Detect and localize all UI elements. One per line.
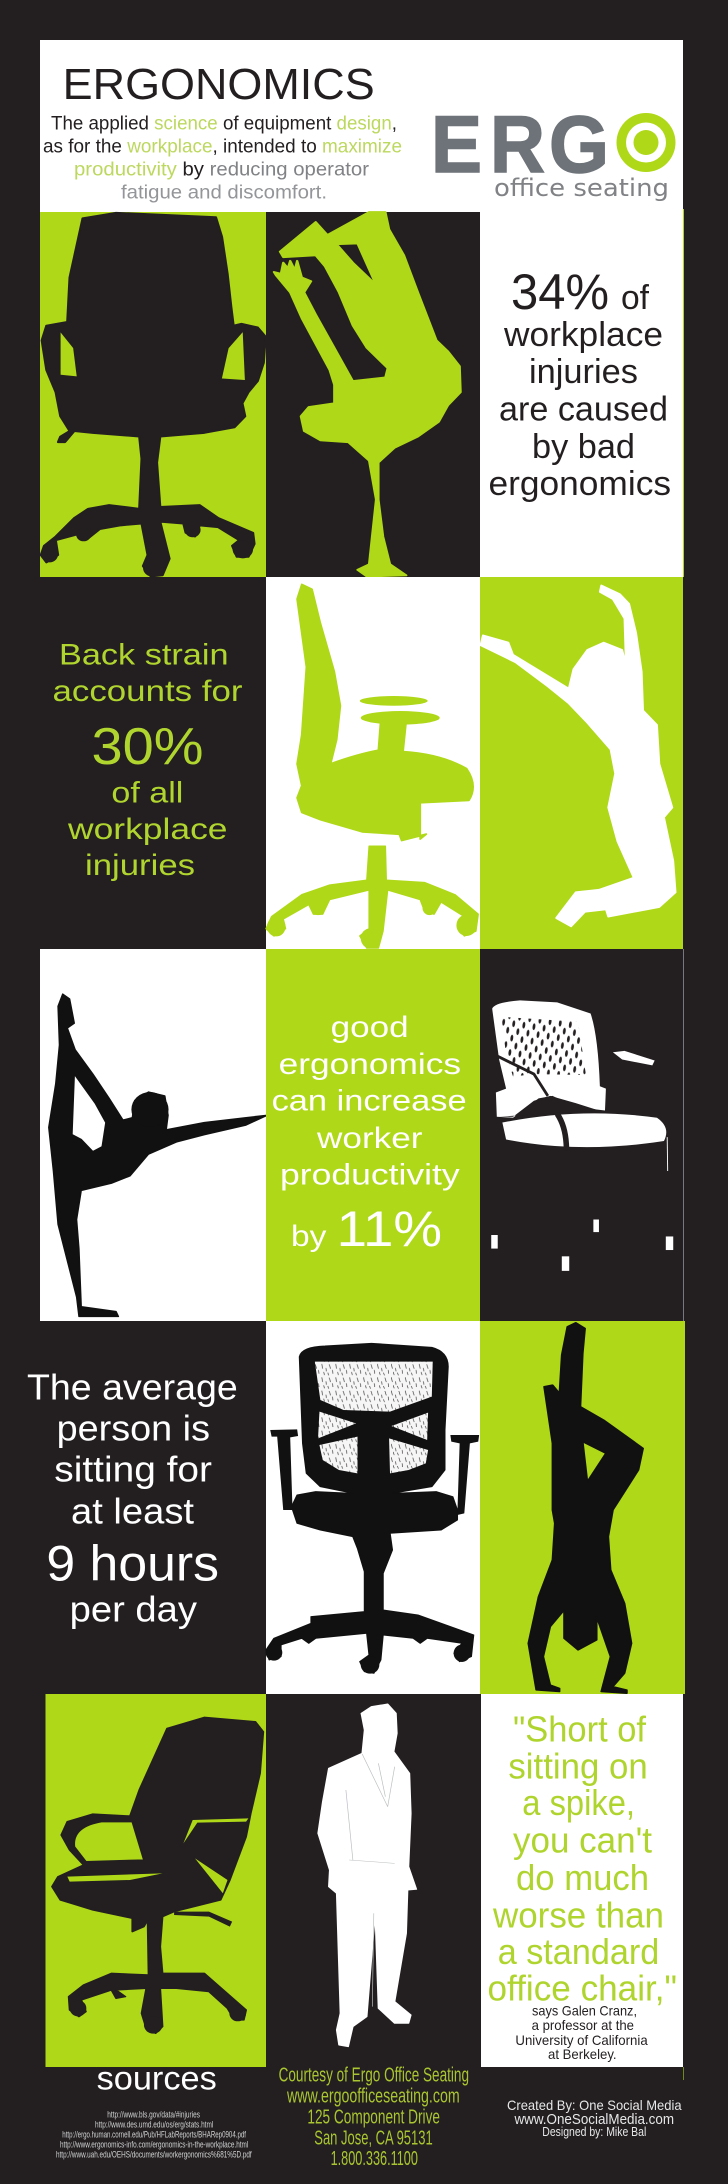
- sources block: sources: [97, 2059, 217, 2096]
- panel: back strain statistic: accounts for: [52, 675, 243, 708]
- panel: 34 percent statistic: 34%: [511, 264, 609, 320]
- panel: 34 percent statistic: ergonomics: [488, 465, 671, 503]
- credits: [507, 2097, 682, 2139]
- panel: productivity statistic: ergonomics: [279, 1048, 461, 1081]
- credits: Created By: One Social Media: [507, 2097, 682, 2113]
- panel: black chair on green: [40, 212, 266, 577]
- logo: R: [490, 100, 545, 190]
- panel: back strain statistic: 30%: [92, 718, 204, 776]
- panel: productivity statistic: worker: [316, 1122, 423, 1155]
- quote attribution: says Galen Cranz,: [532, 2003, 637, 2019]
- panel: productivity statistic: [266, 949, 480, 1321]
- panel: sitting statistic: [27, 1321, 266, 1694]
- sources block: http://www.uah.edu/OEHS/documents/workergonomics%681%5D.pdf: [56, 2150, 252, 2160]
- logo: G: [549, 100, 609, 190]
- company contact details: www.ergoofficeseating.com: [286, 2086, 460, 2108]
- company contact details: Courtesy of Ergo Office Seating: [279, 2065, 469, 2087]
- quote attribution: at Berkeley.: [548, 2046, 617, 2062]
- panel: back strain statistic: of all: [111, 777, 183, 810]
- panel: sitting statistic: sitting for: [54, 1449, 212, 1490]
- quote text: a standard: [498, 1931, 659, 1972]
- quote attribution: University of California: [515, 2032, 648, 2048]
- panel: 34 percent statistic: [480, 209, 684, 577]
- panel: 34 percent statistic: by bad: [532, 428, 635, 466]
- panel: productivity statistic: by: [291, 1220, 326, 1253]
- panel: green handstand figure: [266, 212, 480, 577]
- panel: back strain statistic: [40, 577, 266, 949]
- logo: [431, 100, 676, 202]
- definition text: fatigue and discomfort.: [121, 182, 327, 204]
- panel: productivity statistic: productivity: [280, 1159, 460, 1192]
- definition text: productivity by reducing operator: [74, 159, 370, 181]
- panel: black mesh chair on white: [266, 1321, 480, 1694]
- panel: productivity statistic: can increase: [272, 1084, 467, 1117]
- sources block: http://ergo.human.cornell.edu/Pub/HFLabReports/BHARep0904.pdf: [62, 2130, 246, 2140]
- panel: productivity statistic: 11%: [337, 1201, 442, 1257]
- definition text: The applied science of equipment design,: [51, 112, 397, 134]
- quote text: [488, 1709, 677, 2009]
- logo: E: [431, 100, 482, 190]
- panel: header: [40, 40, 683, 212]
- panel: 34 percent statistic: are caused: [499, 391, 668, 429]
- credits: Designed by: Mike Bal: [542, 2125, 646, 2139]
- sources block: http://www.bls.gov/data/#injuries: [107, 2110, 200, 2120]
- panel: sitting statistic: per day: [70, 1589, 198, 1630]
- sources block: [56, 2059, 252, 2160]
- panel: back strain statistic: Back strain: [59, 638, 228, 672]
- sources block: http://www.des.umd.edu/os/erg/stats.html: [95, 2120, 213, 2130]
- title: ERGONOMICS: [63, 60, 375, 109]
- company contact details: [279, 2065, 469, 2170]
- sources block: http://www.ergonomics-info.com/ergonomics-in-the-workplace.html: [60, 2140, 248, 2150]
- quote attribution: a professor at the: [532, 2017, 634, 2033]
- panel: white jumping woman on green: [480, 577, 683, 949]
- logo: office seating: [494, 174, 669, 202]
- panel: back strain statistic: injuries: [85, 849, 195, 882]
- definition text: [43, 112, 402, 204]
- company contact details: 125 Component Drive: [307, 2106, 440, 2128]
- panel: 34 percent statistic: workplace: [503, 316, 663, 354]
- quote text: a spike,: [522, 1782, 635, 1823]
- panel: 34 percent statistic: of: [621, 279, 650, 317]
- panel: sitting statistic: 9 hours: [46, 1536, 219, 1592]
- quote text: worse than: [492, 1894, 664, 1935]
- credits: www.OneSocialMedia.com: [514, 2112, 674, 2128]
- panel: back strain statistic: workplace: [67, 813, 228, 846]
- definition text: as for the workplace, intended to maximize: [43, 135, 402, 157]
- panel: green chair on white: [266, 577, 480, 949]
- quote text: sitting on: [508, 1746, 648, 1787]
- panel: 34 percent statistic: injuries: [529, 353, 638, 391]
- company contact details: San Jose, CA 95131: [314, 2127, 433, 2149]
- panel: sitting statistic: The average: [27, 1366, 238, 1407]
- panel: black handstand figure on green: [480, 1321, 685, 1694]
- quote text: do much: [516, 1857, 649, 1898]
- panel: productivity statistic: good: [331, 1011, 409, 1044]
- quote attribution: [515, 2003, 648, 2062]
- panel: sitting statistic: person is: [57, 1408, 210, 1449]
- panel: sitting statistic: at least: [71, 1490, 194, 1531]
- company contact details: 1.800.336.1100: [331, 2148, 418, 2170]
- quote text: office chair,": [488, 1968, 677, 2009]
- panel: quotation: [481, 1694, 684, 2080]
- quote text: "Short of: [513, 1709, 647, 1750]
- panel: white standing man on dark: [266, 1694, 481, 2067]
- panel: white chair on dark: [480, 949, 684, 1321]
- panel: black dancer on white: [40, 949, 267, 1321]
- quote text: you can't: [513, 1820, 652, 1861]
- panel: black swivel chair on green: [46, 1694, 266, 2067]
